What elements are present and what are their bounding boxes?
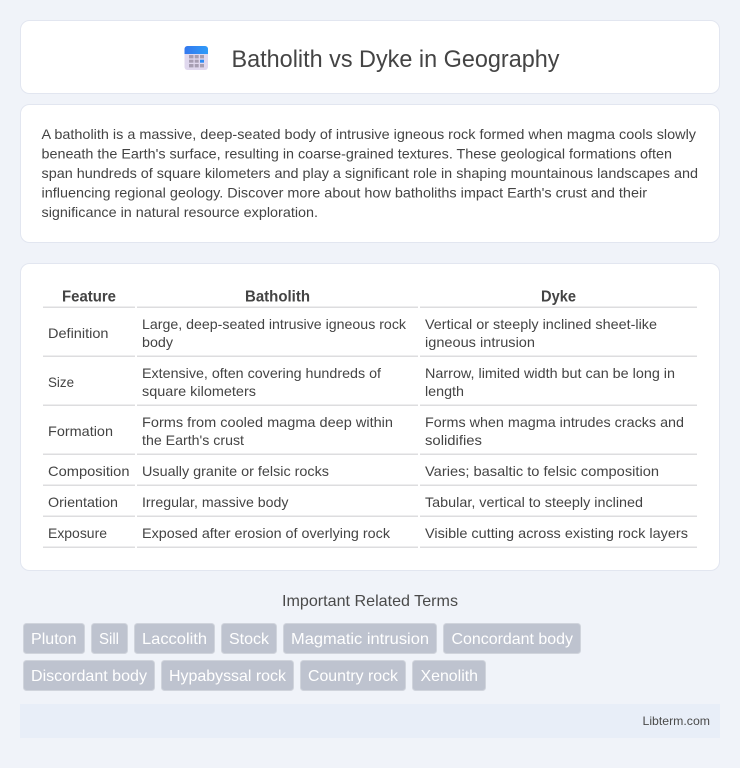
tag: Country rock: Country rock — [308, 668, 399, 685]
table header row: Feature — [62, 288, 116, 306]
table row: definition: body — [142, 334, 173, 350]
table row: exposure — [48, 525, 688, 541]
table row: definition — [48, 316, 657, 350]
tag: Concordant body — [444, 624, 580, 654]
table header row: Batholith — [245, 288, 310, 306]
text block: introduction paragraph: significance in natural resource exploration. — [42, 204, 318, 220]
text block: introduction paragraph: influencing regional geology. Discover more about how batholiths impact Earth's crust and their — [42, 184, 647, 200]
panel: related term tags — [24, 624, 580, 690]
table row: composition — [48, 463, 659, 479]
table row: definition: Vertical or steeply inclined sheet-like — [425, 316, 657, 332]
table row: orientation: Irregular, massive body — [142, 494, 288, 510]
heading: related terms: Important Related Terms — [282, 593, 458, 610]
text block: introduction paragraph — [42, 126, 698, 220]
tag: Sill: Sill — [99, 631, 119, 648]
table row: orientation: Tabular, vertical to steeply inclined — [425, 494, 643, 510]
panel: comparison table — [20, 264, 720, 570]
tag: Discordant body: Discordant body — [31, 668, 147, 685]
table row: formation: the Earth's crust — [142, 432, 244, 448]
table row: size: length — [425, 383, 464, 399]
tag: Hypabyssal rock — [162, 660, 294, 690]
panel: title header — [20, 20, 720, 94]
tag: Xenolith: Xenolith — [420, 668, 478, 685]
table row: formation: Formation — [48, 423, 113, 439]
tag: Magmatic intrusion: Magmatic intrusion — [291, 631, 429, 648]
table row: exposure: Visible cutting across existing rock layers — [425, 525, 688, 541]
table header row: Dyke — [541, 288, 576, 306]
tag: Xenolith — [412, 660, 486, 690]
table row: formation: Forms from cooled magma deep within — [142, 414, 393, 430]
table row: composition: Usually granite or felsic rocks — [142, 463, 329, 479]
title: Batholith vs Dyke in Geography — [232, 46, 560, 73]
table row: definition: igneous intrusion — [425, 334, 535, 350]
table row: size: Narrow, limited width but can be long in — [425, 365, 675, 381]
table row: formation: Forms when magma intrudes cracks and — [425, 414, 684, 430]
table row: size — [48, 365, 675, 399]
table row: definition: Large, deep-seated intrusive igneous rock — [142, 316, 407, 332]
table row: composition: Varies; basaltic to felsic composition — [425, 463, 659, 479]
icon: calendar — [184, 46, 208, 70]
tag: Hypabyssal rock: Hypabyssal rock — [169, 668, 287, 685]
tag: Laccolith — [134, 624, 214, 654]
tag: Laccolith: Laccolith — [142, 631, 207, 648]
table header row — [62, 288, 576, 306]
panel: introduction — [20, 104, 720, 242]
tag: Pluton: Pluton — [31, 631, 76, 648]
text block: introduction paragraph: A batholith is a massive, deep-seated body of intrusive igneous rock formed when magma cools slowly — [42, 126, 696, 142]
text block: introduction paragraph: span hundreds of square kilometers and play a significant role in shaping mountainous landscapes and — [42, 165, 698, 181]
table row: exposure: Exposed after erosion of overlying rock — [142, 525, 391, 541]
footer bar — [20, 704, 720, 738]
table row: orientation — [48, 494, 643, 510]
tag: Pluton — [24, 624, 84, 654]
tag: Discordant body — [24, 660, 154, 690]
table row: definition: Definition — [48, 325, 108, 341]
table row: formation — [48, 414, 684, 448]
table row: composition: Composition — [48, 463, 130, 479]
table row: size: Extensive, often covering hundreds of — [142, 365, 381, 381]
table row: formation: solidifies — [425, 432, 482, 448]
table row: size: Size — [48, 374, 74, 390]
text block: introduction paragraph: beneath the Earth's surface, resulting in coarse-grained textures. These geological formations often — [42, 146, 672, 162]
tag: Magmatic intrusion — [284, 624, 436, 654]
tag: Sill — [92, 624, 128, 654]
tag: Stock — [222, 624, 276, 654]
tag: Stock: Stock — [229, 631, 270, 648]
tag: Country rock — [300, 660, 406, 690]
table row: orientation: Orientation — [48, 494, 118, 510]
footer credit: Libterm.com — [642, 714, 710, 728]
table row: size: square kilometers — [142, 383, 256, 399]
table row: exposure: Exposure — [48, 525, 107, 541]
tag: Concordant body: Concordant body — [452, 631, 573, 648]
